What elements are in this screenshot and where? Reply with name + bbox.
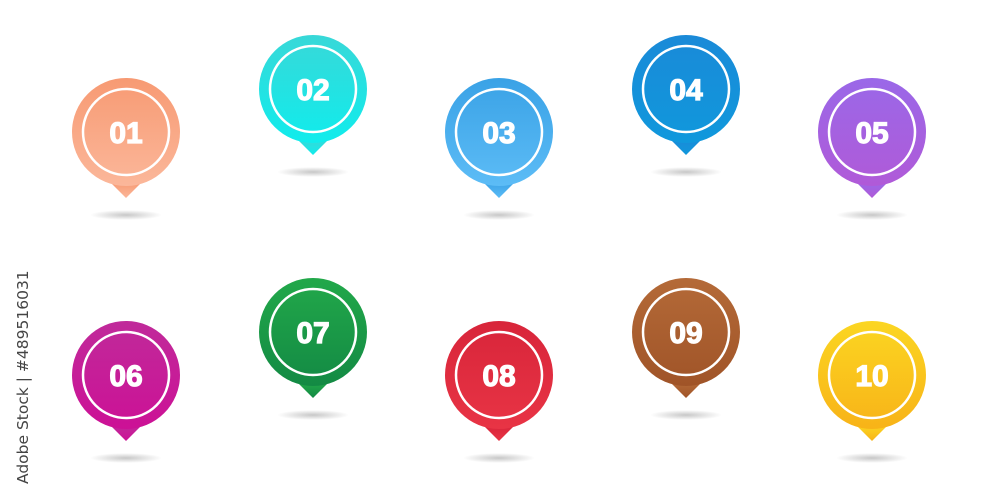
- pin 09: [632, 278, 740, 420]
- pin 02: [259, 35, 367, 177]
- pin 08: 08: [482, 360, 516, 393]
- pin 01: 01: [109, 117, 143, 150]
- pin 06: [72, 321, 180, 463]
- pin 03: [445, 78, 553, 220]
- pin 06: 06: [109, 360, 143, 393]
- pin 05: [818, 78, 926, 220]
- pin 05: 05: [855, 117, 889, 150]
- pin 01: [72, 78, 180, 220]
- pin 07: [259, 278, 367, 420]
- pin 04: 04: [669, 74, 703, 107]
- pin 02: 02: [296, 74, 330, 107]
- pin 07: 07: [296, 317, 330, 350]
- pin 09: 09: [669, 317, 703, 350]
- pin 08: [445, 321, 553, 463]
- pin 03: 03: [482, 117, 516, 150]
- watermark: vertical stock id: Adobe Stock | #489516031: [14, 270, 32, 484]
- pin 10: [818, 321, 926, 463]
- pin 04: [632, 35, 740, 177]
- pin 10: 10: [855, 360, 889, 393]
